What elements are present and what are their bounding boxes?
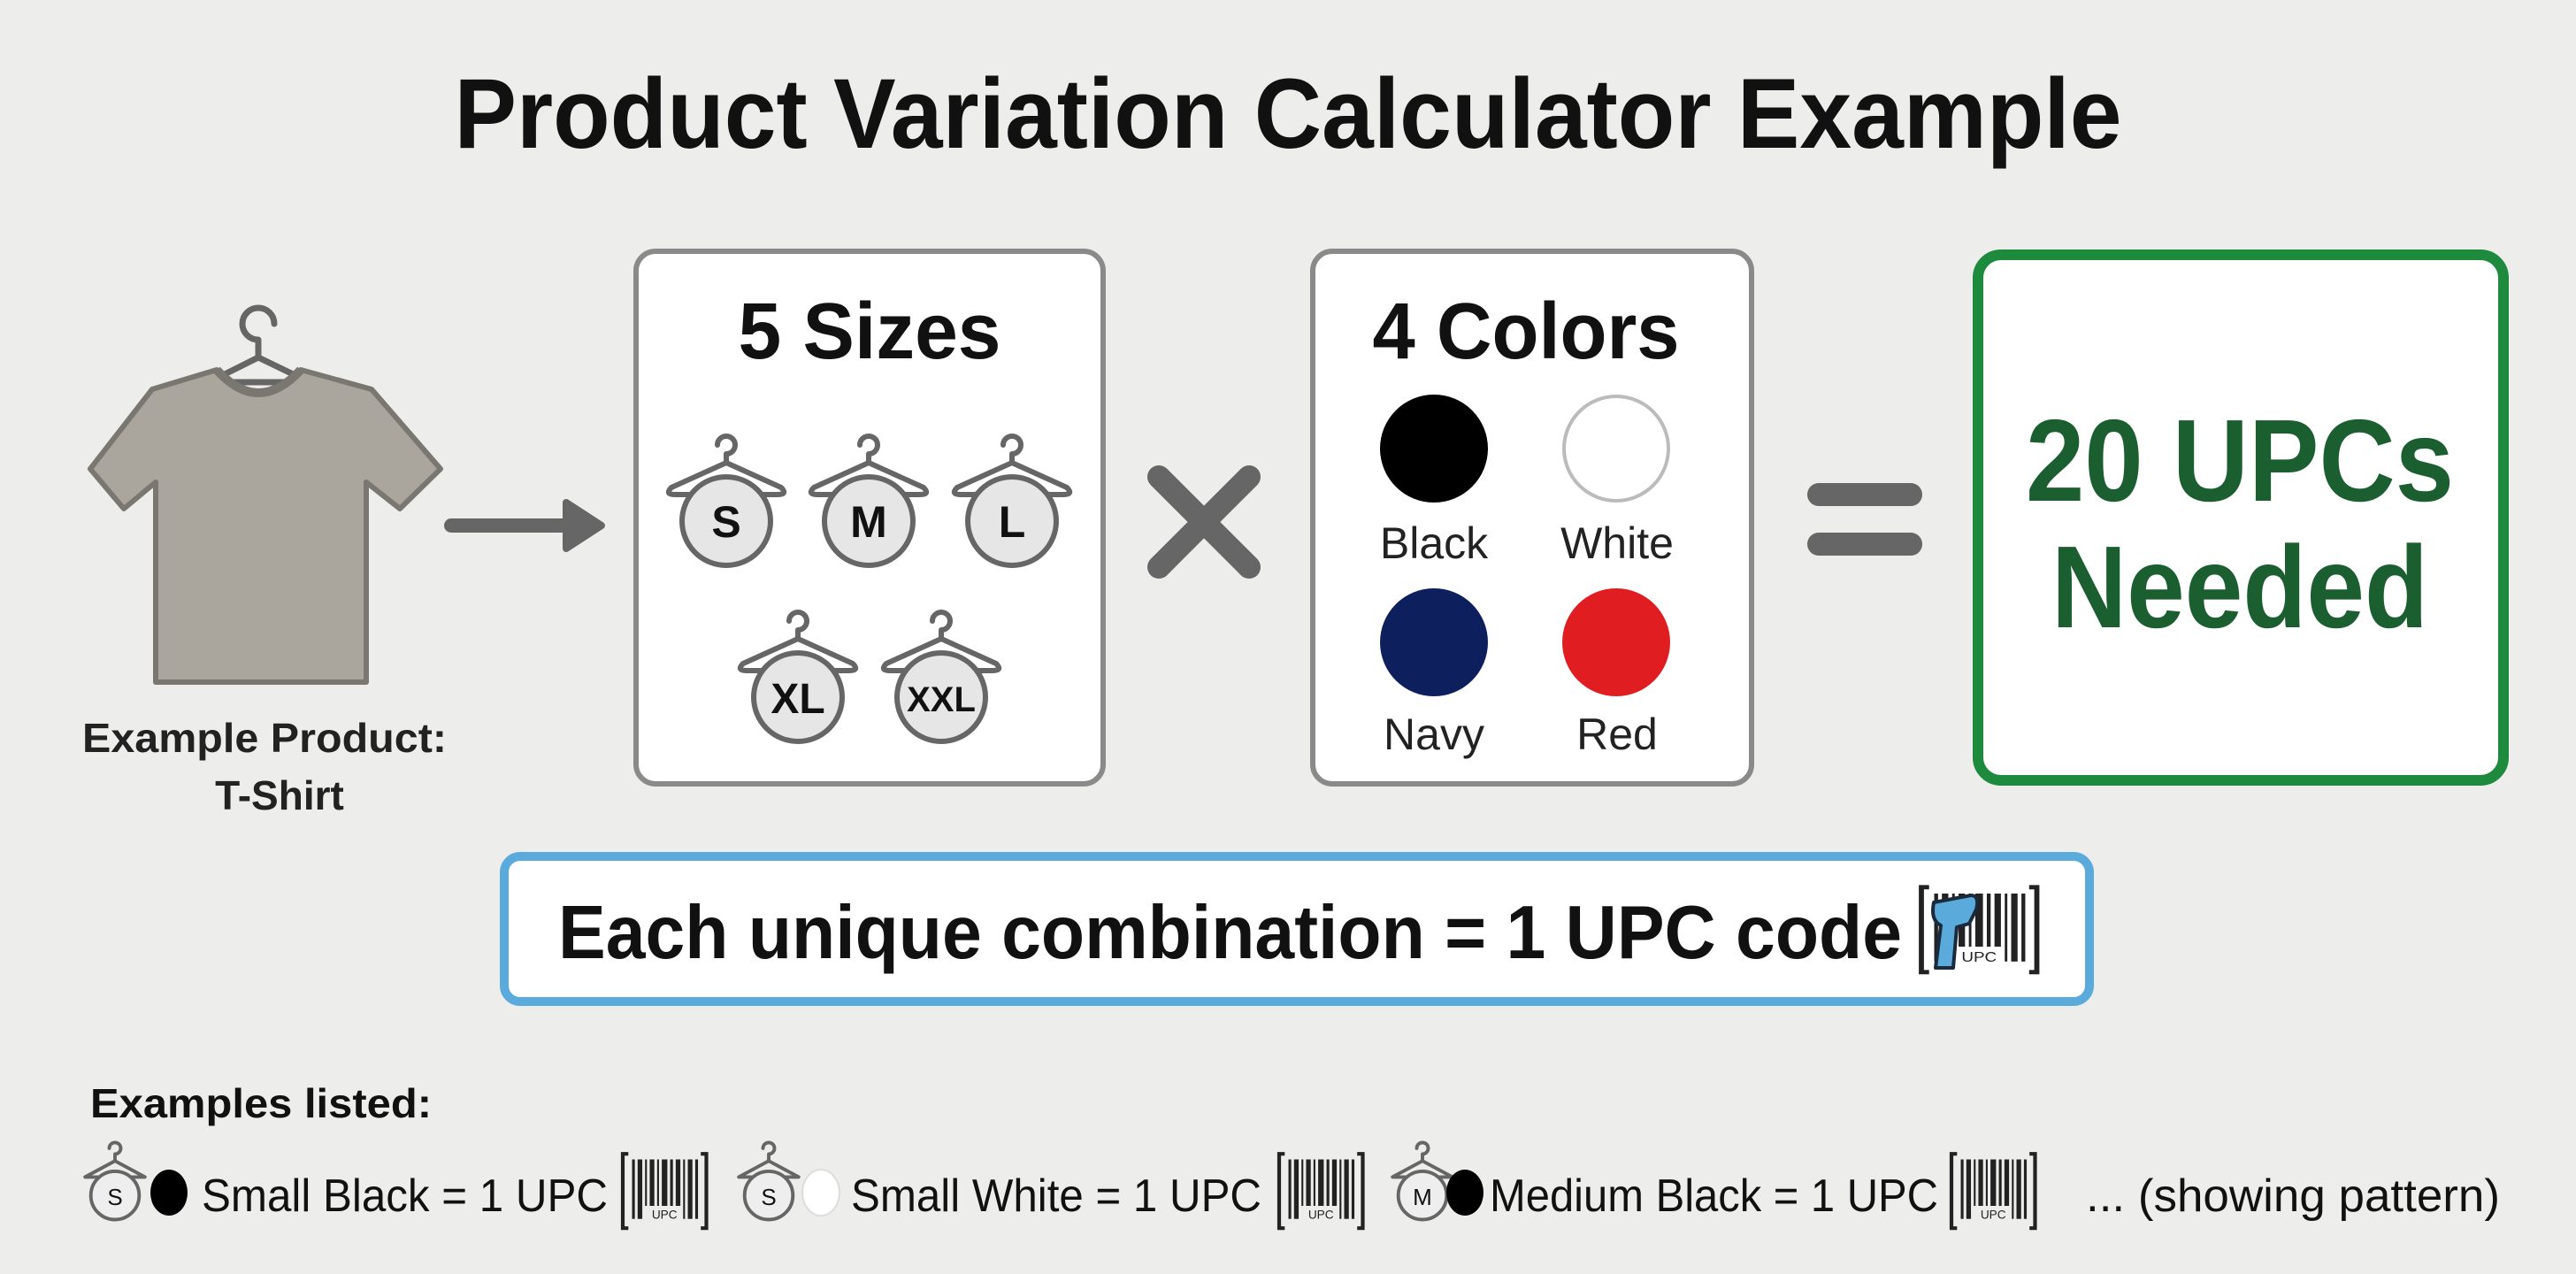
- title: Product Variation Calculator Example: [455, 58, 2121, 169]
- size hangers: XXL: [907, 680, 976, 719]
- examples row: [85, 1142, 2500, 1228]
- color labels: Red: [1576, 710, 1658, 759]
- size hangers: S: [711, 497, 741, 547]
- color swatches: [1380, 395, 1670, 696]
- example: medium black: [1392, 1142, 2035, 1228]
- example: medium black: Medium Black = 1 UPC: [1490, 1170, 1938, 1222]
- heading: examples listed: Examples listed:: [90, 1080, 432, 1126]
- panel: sizes: [636, 251, 1103, 784]
- example: small black: Small Black = 1 UPC: [202, 1170, 608, 1222]
- callout: each combination: Each unique combination = 1 UPC code: [558, 891, 1902, 975]
- color labels: Black: [1380, 518, 1489, 568]
- icon: barcode scanner: [1921, 887, 2036, 972]
- pattern note: ... (showing pattern): [2086, 1170, 2500, 1222]
- size hangers: L: [999, 497, 1025, 547]
- panel: result: Needed: [2051, 522, 2428, 652]
- color labels: Navy: [1384, 710, 1484, 759]
- size hangers: XL: [770, 676, 825, 723]
- panel: colors: [1313, 251, 1752, 784]
- heading: 4 colors: 4 Colors: [1373, 288, 1679, 376]
- example: small white: [739, 1142, 1362, 1228]
- example: small black: [85, 1142, 706, 1228]
- example: small black: S: [107, 1184, 123, 1210]
- panel: result: [1978, 255, 2503, 780]
- icon: multiply: [1159, 477, 1249, 567]
- product label: Example Product:: [82, 715, 447, 761]
- color labels: White: [1560, 518, 1674, 568]
- example: medium black: M: [1413, 1184, 1432, 1210]
- example: small white: S: [761, 1184, 777, 1210]
- arrow: [451, 503, 602, 549]
- size hangers: [669, 436, 1070, 741]
- color labels: [1380, 518, 1674, 759]
- icon: t-shirt on hanger: [90, 308, 441, 682]
- size hangers: M: [850, 497, 887, 547]
- icon: equals: [1819, 495, 1911, 544]
- panel: result: 20 UPCs: [2026, 395, 2454, 526]
- product label: [82, 715, 447, 818]
- product label: T-Shirt: [215, 772, 344, 818]
- example: small white: Small White = 1 UPC: [851, 1170, 1261, 1222]
- heading: 5 sizes: 5 Sizes: [738, 288, 1001, 376]
- callout: each combination: [504, 856, 2089, 1002]
